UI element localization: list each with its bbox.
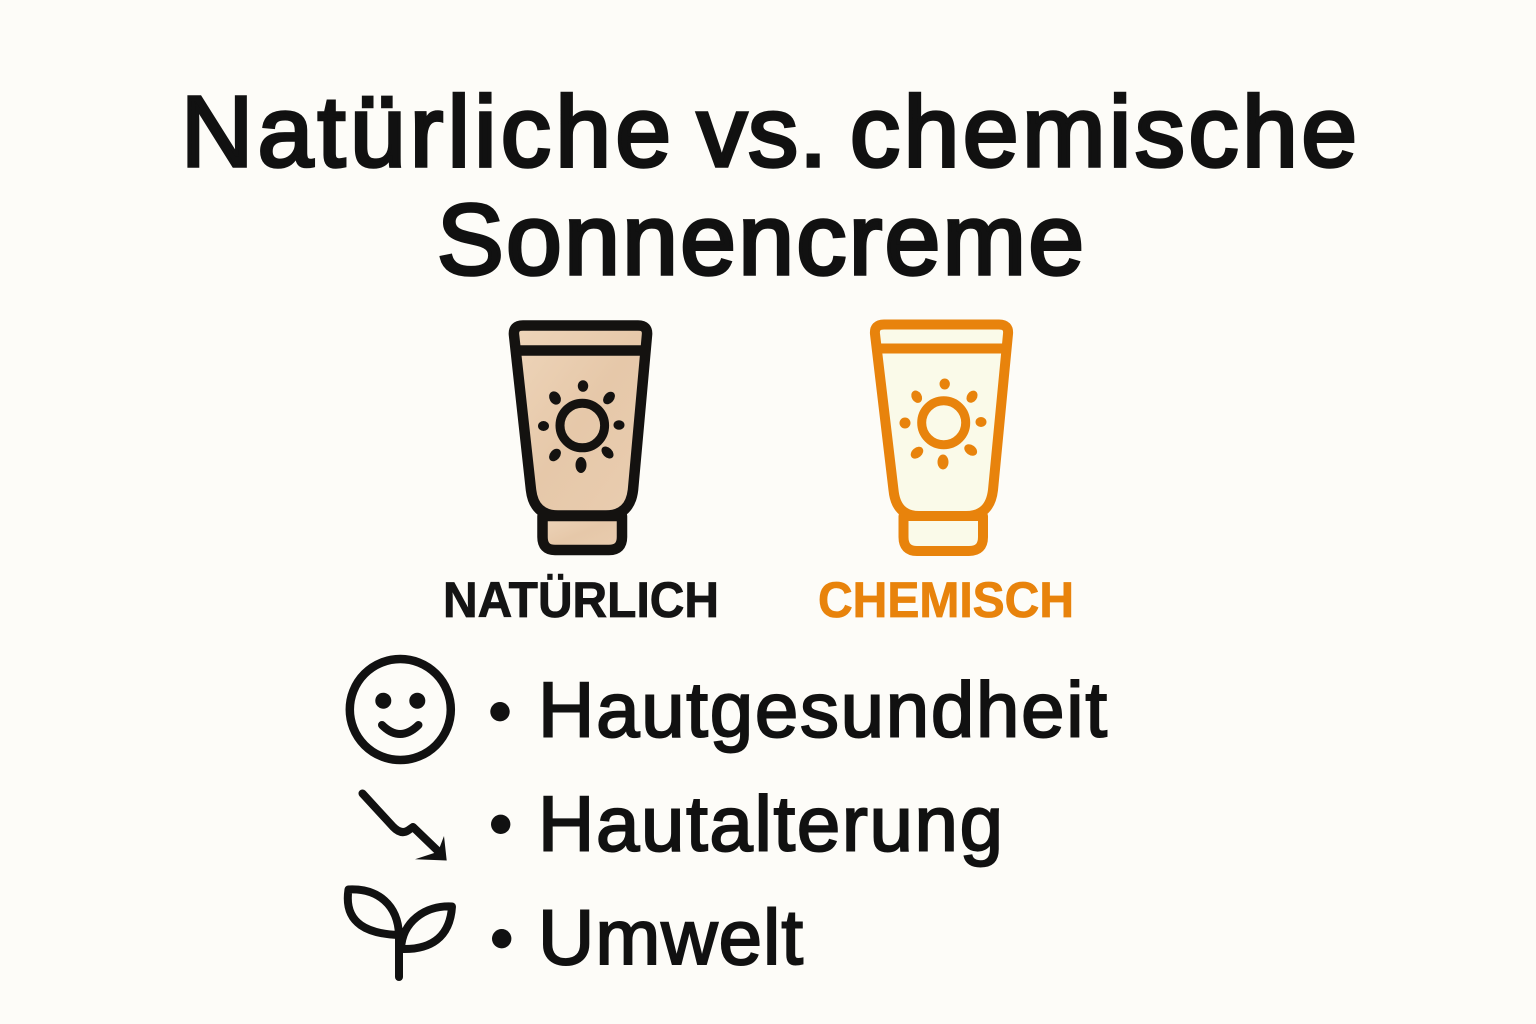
icon: natural sun <box>538 380 624 473</box>
icon: chemical sun <box>900 378 986 470</box>
list item: Hautgesundheit: Hautgesundheit <box>538 666 1107 754</box>
title <box>181 76 1357 296</box>
list item: Hautalterung: Hautalterung <box>538 780 1003 868</box>
icon: smiley face <box>350 659 451 760</box>
title: Natürliche <box>181 76 671 188</box>
label: chemisch: CHEMISCH <box>818 572 1074 628</box>
title: vs. <box>697 76 827 188</box>
title: chemische <box>850 76 1357 188</box>
list item: Umwelt: Umwelt <box>538 893 803 981</box>
title: Sonnencreme <box>437 184 1084 296</box>
icon: downward arrow <box>362 794 447 860</box>
icon: leaf sprout <box>348 889 452 977</box>
label: natürlich: NATÜRLICH <box>443 572 719 628</box>
icon: chemical sunscreen tube <box>875 324 1008 551</box>
icon: natural sunscreen tube <box>514 326 647 550</box>
